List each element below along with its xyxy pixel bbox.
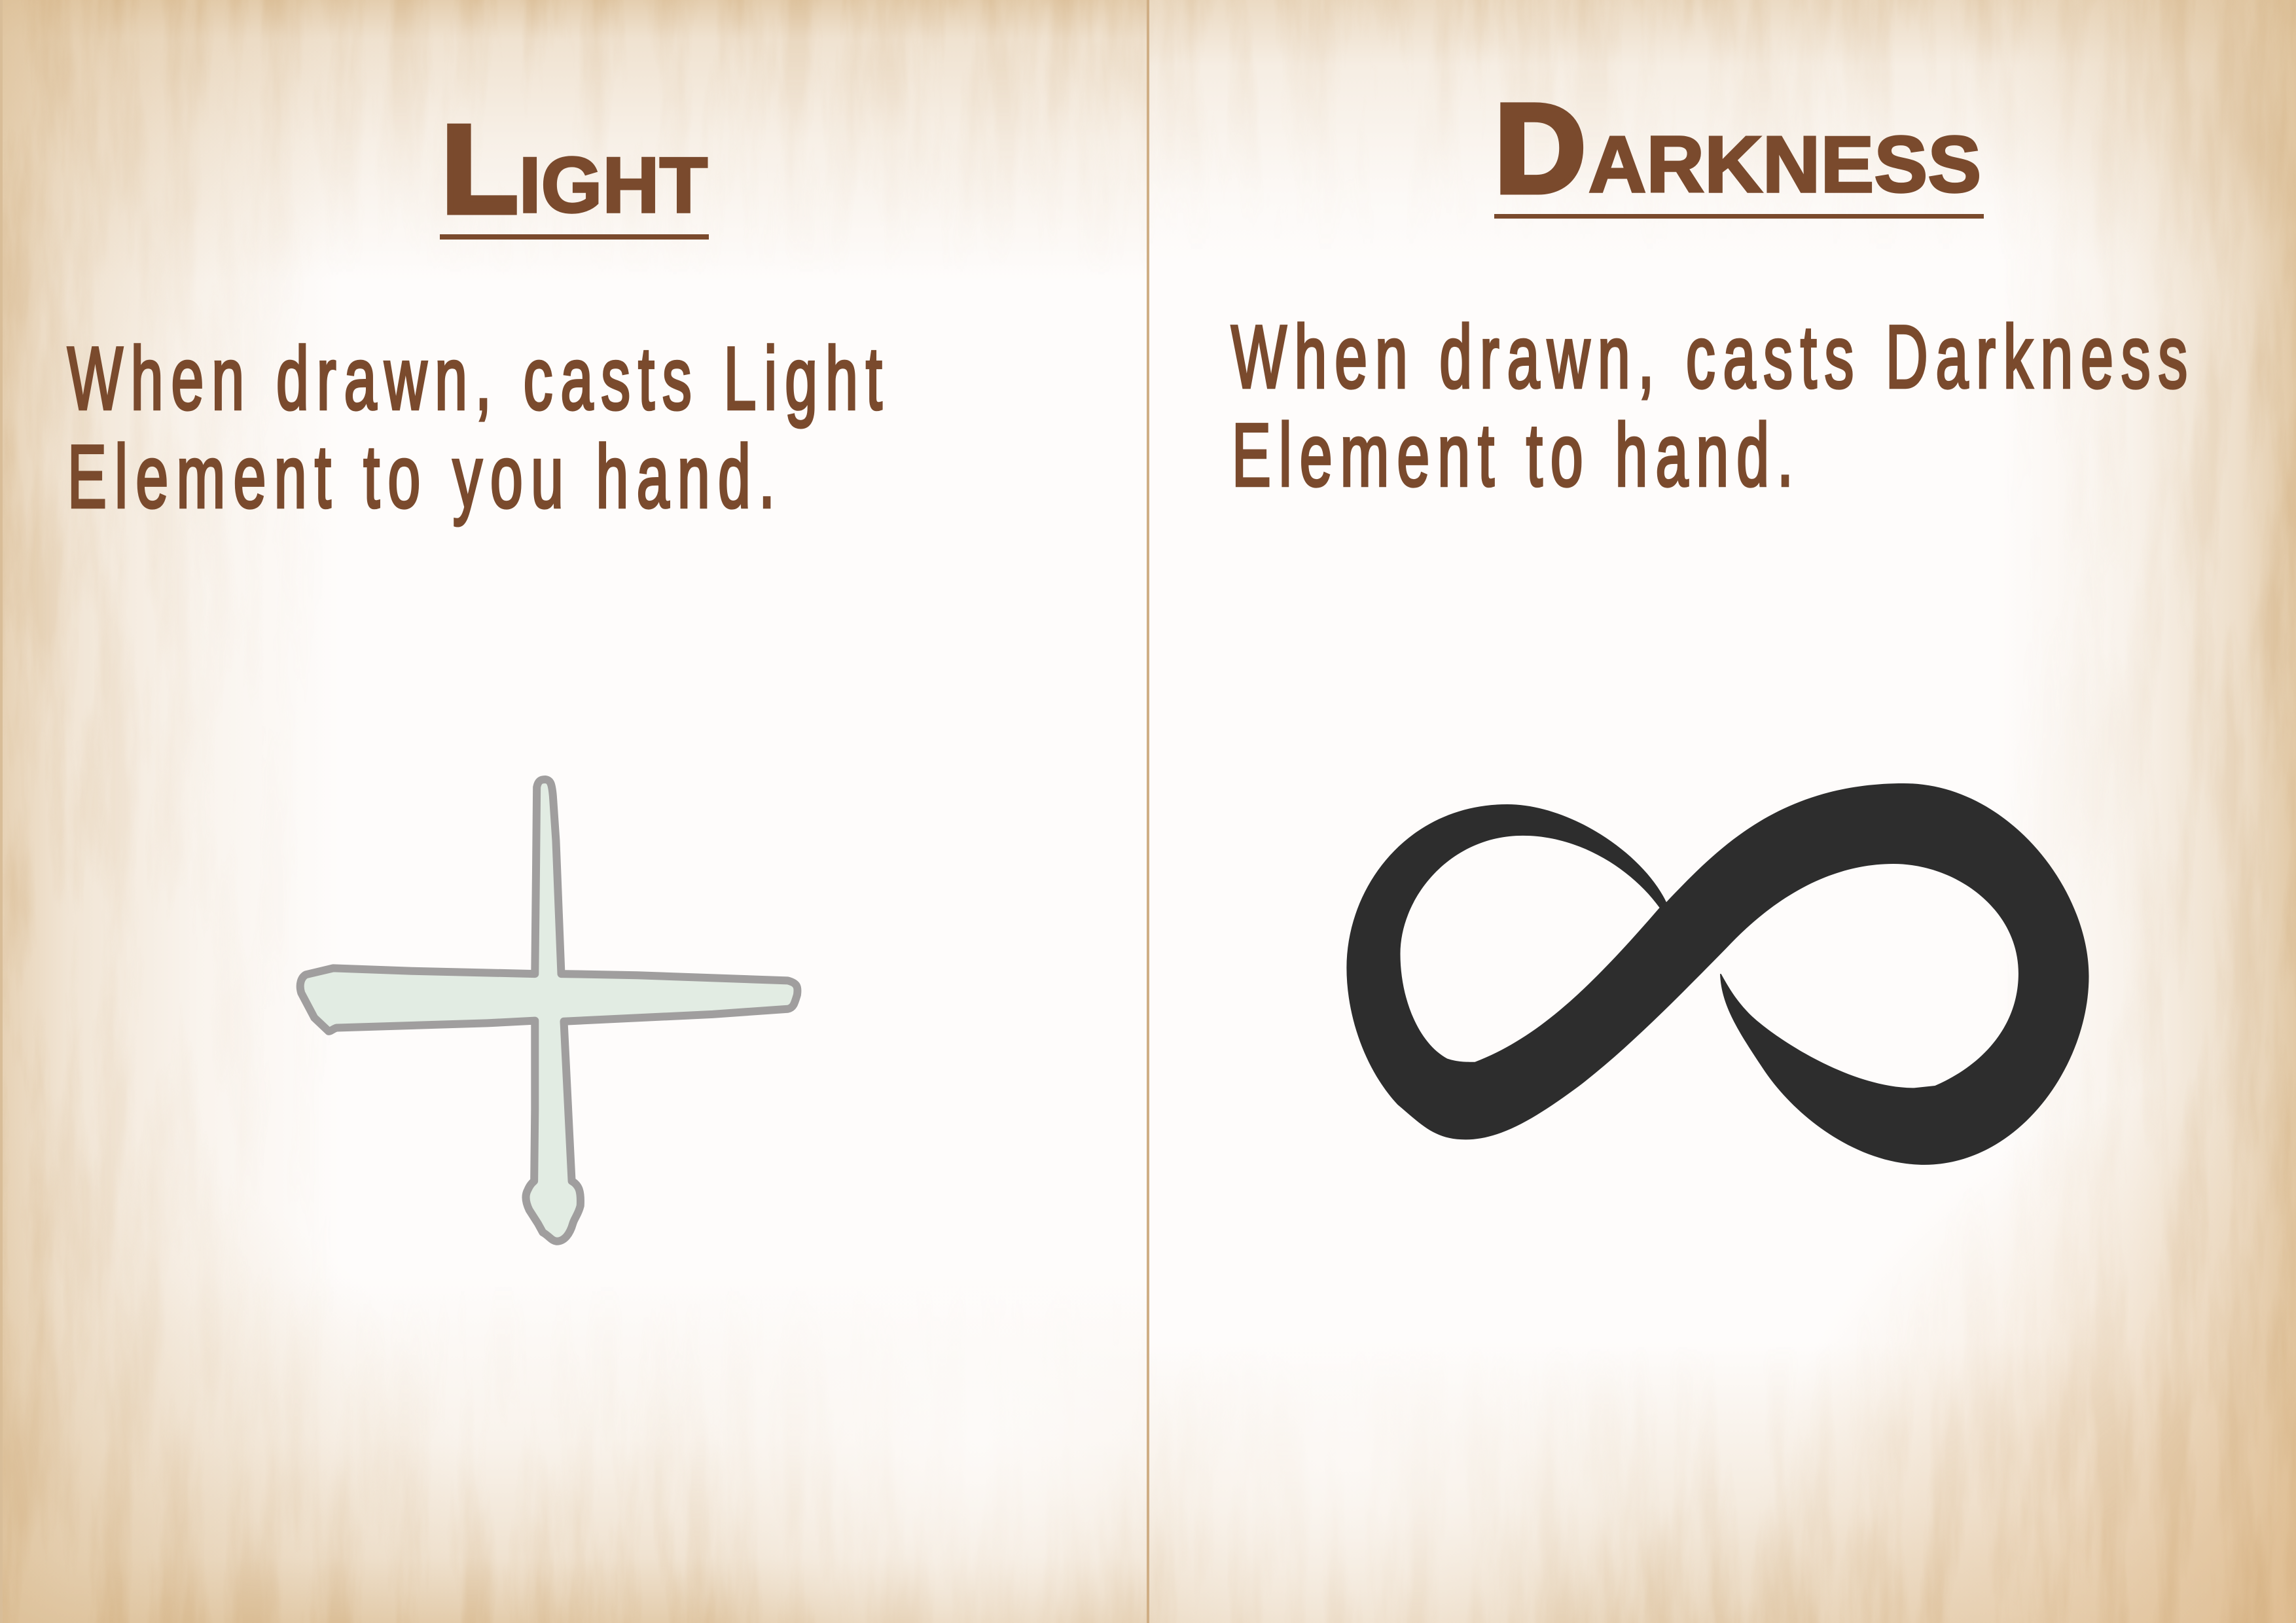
panel: Darkness card — [1231, 78, 2187, 1165]
heading: Light — [440, 100, 709, 240]
centre divider line — [1147, 0, 1149, 1623]
heading: Light: L — [442, 100, 518, 239]
text block: Light description: Element to you hand. — [67, 427, 775, 527]
text block: Light description — [67, 329, 882, 527]
text block: Darkness description: Element to hand. — [1232, 406, 1793, 505]
panel: Light card — [67, 100, 882, 1241]
text block: Light description: When drawn, casts Light — [67, 329, 882, 429]
heading: Darkness: D — [1495, 78, 1586, 219]
heading: Darkness — [1494, 78, 1984, 219]
icon: light cross rune — [300, 779, 797, 1241]
heading: Light: IGHT — [519, 141, 708, 229]
icon: darkness infinity symbol — [1346, 783, 2089, 1165]
heading: Darkness: ARKNESS — [1588, 120, 1981, 209]
text block: Darkness description — [1231, 308, 2187, 505]
text block: Darkness description: When drawn, casts Darkness — [1231, 308, 2187, 407]
